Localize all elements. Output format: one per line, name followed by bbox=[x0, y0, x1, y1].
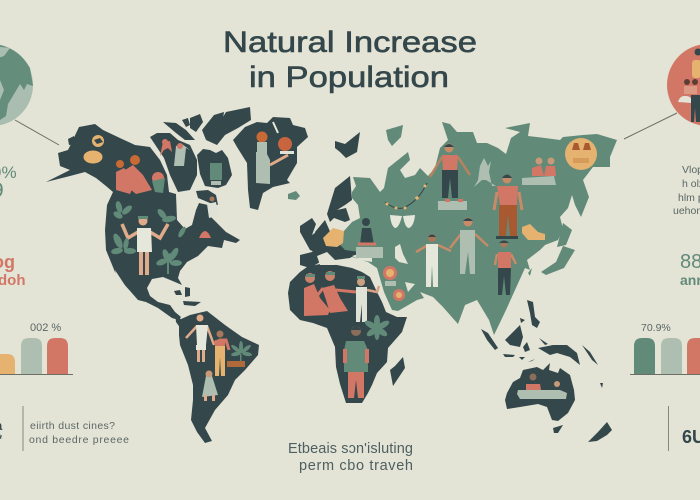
map: Australia bbox=[505, 363, 575, 421]
icon: leaves on North America bbox=[111, 200, 187, 274]
stat: right number bbox=[680, 251, 700, 288]
figures: pink pair in northern Canada bbox=[160, 139, 190, 166]
bar chart: right: 70.9% bbox=[641, 322, 671, 334]
globe: right bbox=[667, 44, 700, 126]
divider: lower right bbox=[668, 406, 669, 451]
map: green islands bbox=[288, 125, 403, 200]
figure: person in white holding hands bbox=[416, 234, 451, 287]
figure: seated woman on platform bbox=[356, 218, 383, 258]
icon: tan dog bbox=[522, 224, 545, 240]
map: Africa bbox=[288, 264, 407, 403]
title: in Population bbox=[249, 61, 449, 94]
icon: coral dome bbox=[199, 231, 211, 238]
text: bottom center caption: perm cbo traveh bbox=[299, 458, 413, 474]
figures: South America group bbox=[186, 314, 229, 401]
icon: leaf and brown block in Brazil bbox=[227, 341, 252, 367]
map: Iceland bbox=[335, 132, 360, 158]
figure: person in coral top and dark trousers bbox=[495, 240, 516, 295]
icon: tan circle with figures bbox=[565, 138, 597, 170]
bar chart: left bbox=[0, 322, 73, 375]
world map bbox=[46, 107, 617, 443]
icon: bunting string bbox=[385, 183, 427, 228]
figure: person in coral shirt and brown trousers bbox=[494, 174, 522, 239]
figures: seated pair in North Africa bbox=[304, 271, 356, 316]
figures: seated pair on pale base bbox=[522, 158, 556, 185]
text: lower left note bbox=[29, 420, 129, 446]
map: South America bbox=[179, 311, 259, 443]
map: Greenland bbox=[233, 117, 308, 210]
figure: person in green top and coral trousers bbox=[343, 326, 369, 398]
figure: pale sage silhouette bbox=[474, 158, 496, 187]
figure: white-clothed person in Africa bbox=[356, 276, 379, 322]
icon: green figure on dark island bbox=[210, 154, 222, 185]
map: Madagascar bbox=[390, 357, 405, 386]
map: North America bbox=[46, 107, 251, 329]
bar chart: right bbox=[630, 322, 700, 375]
divider: lower left bbox=[22, 406, 24, 451]
map: Western Europe bbox=[300, 176, 360, 268]
figure: person in coral top on platform bbox=[430, 144, 470, 210]
text: bottom center caption: Etbeais sɔn'isluting bbox=[288, 441, 413, 457]
text: bottom center caption bbox=[288, 441, 413, 474]
map: New Zealand and Tasmania bbox=[553, 422, 612, 442]
figures: Australia pair on pale form bbox=[517, 374, 567, 399]
text: lower left note: ond beedre preeee bbox=[29, 434, 129, 446]
figure: greenland person holding tray bbox=[256, 122, 294, 184]
icon: tan oval bbox=[84, 150, 102, 164]
bar chart: left: 002 % bbox=[30, 322, 61, 334]
stat: lower left fragment bbox=[0, 418, 3, 446]
connector line: right globe to map bbox=[624, 113, 677, 139]
icon: tan blob in Europe bbox=[323, 228, 344, 247]
stat: left percent bbox=[0, 163, 17, 202]
title: Natural Increase bbox=[223, 26, 477, 59]
figures: seated pair in Canada bbox=[116, 155, 165, 194]
globe: left bbox=[0, 44, 33, 126]
text: lower left note: eiirth dust cines? bbox=[30, 420, 115, 432]
title bbox=[223, 26, 477, 94]
map: Eurasia bbox=[340, 122, 617, 335]
text: right paragraph bbox=[673, 164, 700, 217]
map: Gulf of California bbox=[115, 270, 128, 291]
figure: person with raised arms and leaves bbox=[122, 216, 168, 275]
figure: person in sage overalls bbox=[450, 218, 488, 274]
figure: pale standing figure bbox=[207, 196, 218, 218]
map: inland seas bbox=[317, 244, 415, 292]
icon: leaf in East Africa bbox=[363, 315, 391, 340]
connector line: left globe to map bbox=[15, 120, 59, 145]
text: left coral label bbox=[0, 252, 26, 289]
icon: coral circles over Arabia bbox=[383, 266, 405, 301]
map: Southeast Asia islands bbox=[481, 300, 603, 388]
map: Japan and Asian islands bbox=[528, 223, 575, 276]
icon: tan badge with animal bbox=[92, 135, 104, 147]
